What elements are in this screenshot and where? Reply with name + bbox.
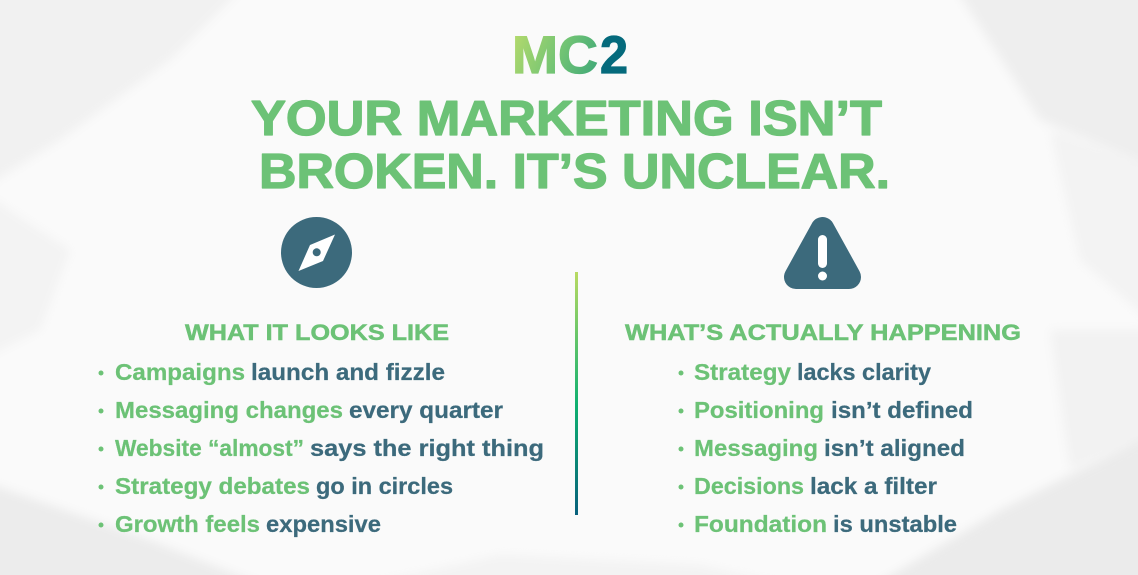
list: causes: is unstable [833,511,957,537]
list: symptoms: Campaigns [115,359,245,385]
list: causes: Strategy [694,359,791,385]
list: causes: lacks clarity [797,359,931,385]
list: symptoms: Growth feels [115,511,260,537]
title: YOUR MARKETING ISN’T [251,92,882,146]
list: causes: Decisions [694,473,804,499]
list: symptoms: expensive [266,511,381,537]
title [251,92,890,199]
list: symptoms: Messaging changes [115,397,343,423]
list: causes [678,359,973,537]
list: causes: isn’t aligned [824,435,965,461]
panel: what's actually happening [625,320,1021,537]
icon: compass [281,217,352,288]
list: causes: lack a filter [810,473,937,499]
list: causes: Positioning [694,397,824,423]
list: symptoms: every quarter [349,397,503,423]
logo: MC2: 2 [600,26,628,85]
divider [575,272,578,515]
list: symptoms: says the right thing [310,435,544,461]
list: causes: isn’t defined [831,397,973,423]
list: symptoms [98,359,544,537]
title: BROKEN. IT’S UNCLEAR. [259,145,890,199]
icon: warning triangle [796,229,849,280]
heading: what it looks like: WHAT IT LOOKS LIKE [185,320,449,345]
heading: what's actually happening: WHAT’S ACTUALLY HAPPENING [625,320,1021,345]
list: symptoms: go in circles [316,473,453,499]
list: causes: Foundation [694,511,827,537]
logo: MC2: MC [512,26,598,85]
list: causes: Messaging [694,435,818,461]
list: symptoms: Strategy debates [115,473,310,499]
list: symptoms: Website “almost” [115,435,304,461]
panel: what it looks like [98,320,544,537]
list: symptoms: launch and fizzle [251,359,445,385]
